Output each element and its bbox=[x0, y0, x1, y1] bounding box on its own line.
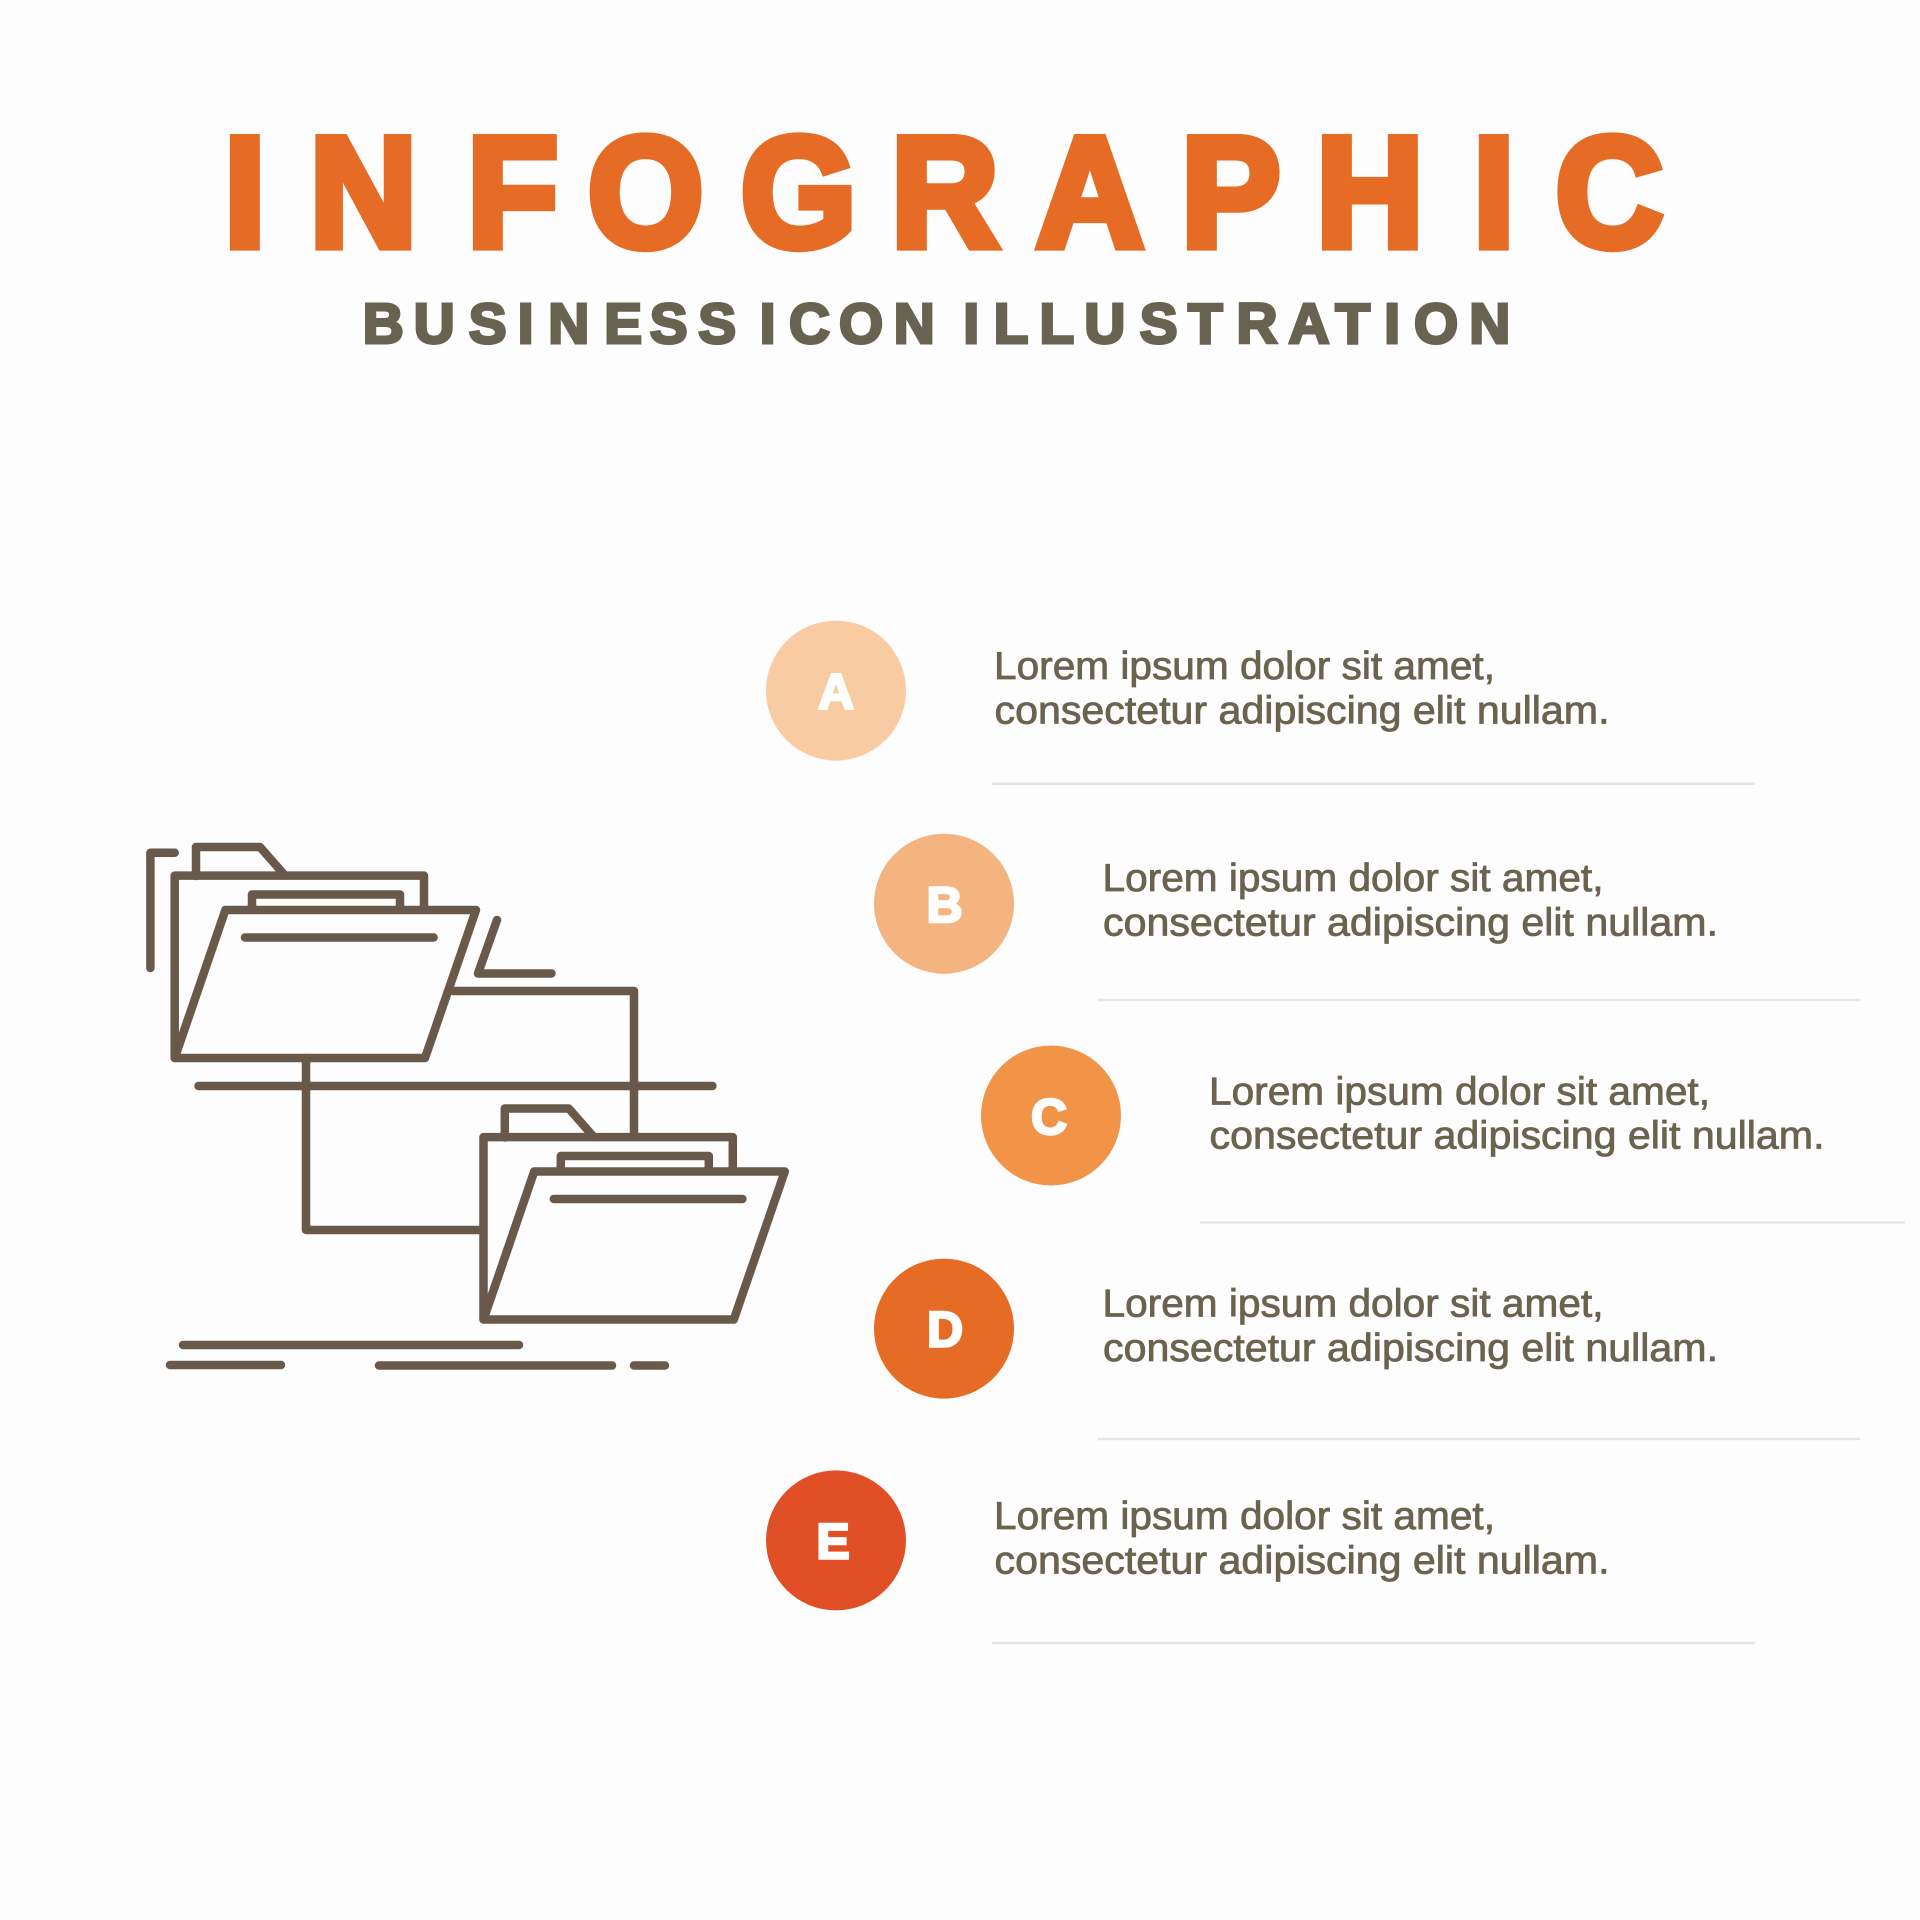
text E line two: consectetur adipiscing elit nullam. bbox=[994, 1540, 1610, 1583]
text C line one: Lorem ipsum dolor sit amet, bbox=[1209, 1070, 1710, 1114]
text A line one: Lorem ipsum dolor sit amet, bbox=[994, 645, 1495, 688]
letter C: C bbox=[1031, 1089, 1067, 1145]
text D line one: Lorem ipsum dolor sit amet, bbox=[1102, 1282, 1604, 1326]
badge D bbox=[874, 1259, 1014, 1399]
badge A bbox=[766, 621, 906, 761]
item B bbox=[874, 834, 1860, 1000]
badge B bbox=[874, 834, 1014, 974]
text A line two: consectetur adipiscing elit nullam. bbox=[994, 690, 1610, 733]
corner bracket accent bbox=[150, 853, 175, 968]
subtitle: BUSINESS ICON ILLUSTRATION bbox=[363, 293, 1510, 356]
text C line two: consectetur adipiscing elit nullam. bbox=[1210, 1114, 1824, 1158]
title: INFOGRAPHIC bbox=[224, 106, 1663, 280]
text E line one: Lorem ipsum dolor sit amet, bbox=[994, 1495, 1495, 1538]
icon: folder hierarchy tree bbox=[150, 847, 785, 1366]
item E bbox=[766, 1470, 1755, 1643]
connector: folder one to folder two, left bbox=[306, 1058, 483, 1230]
letter B: B bbox=[926, 877, 963, 933]
connector: folder one to folder two, right bbox=[453, 991, 634, 1136]
text B line one: Lorem ipsum dolor sit amet, bbox=[1102, 857, 1604, 900]
text B line two: consectetur adipiscing elit nullam. bbox=[1103, 901, 1718, 944]
letter D: D bbox=[927, 1302, 963, 1358]
badge C bbox=[981, 1046, 1121, 1186]
item A bbox=[766, 621, 1755, 784]
horizontal accent line bbox=[198, 1082, 712, 1090]
item C bbox=[981, 1046, 1905, 1222]
notch accent line bbox=[478, 920, 552, 974]
folder: top left bbox=[175, 847, 476, 1058]
letter A: A bbox=[818, 664, 854, 720]
item D bbox=[874, 1259, 1860, 1439]
ground lines bbox=[170, 1345, 665, 1366]
text D line two: consectetur adipiscing elit nullam. bbox=[1103, 1327, 1718, 1370]
folder: bottom right bbox=[484, 1108, 785, 1320]
letter E: E bbox=[816, 1514, 850, 1570]
badge E bbox=[766, 1470, 906, 1610]
